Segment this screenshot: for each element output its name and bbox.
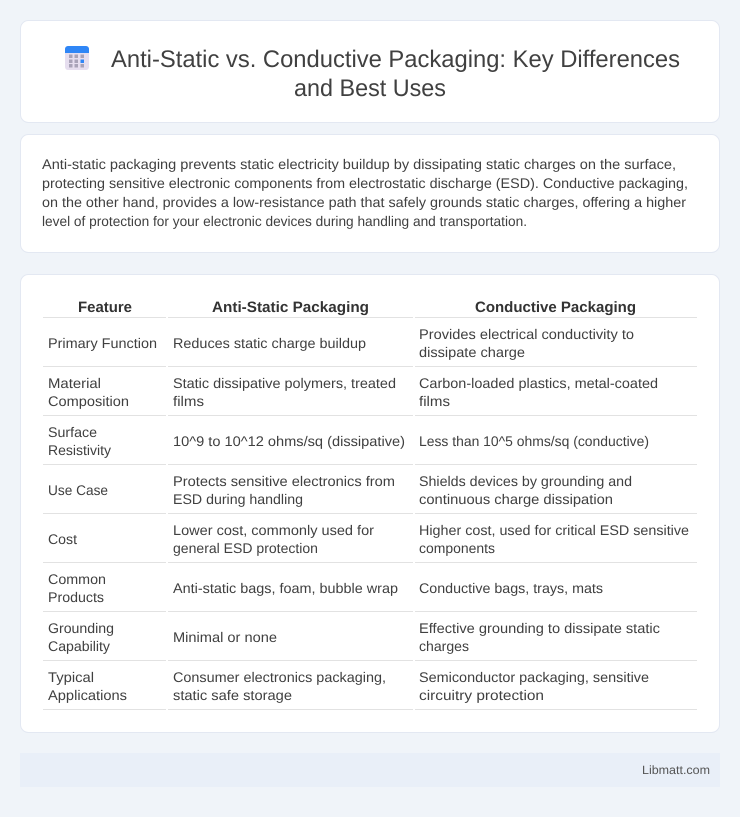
row: common products: Products: [48, 589, 104, 605]
row: primary function: Primary Function: [48, 335, 157, 351]
row: common products: [48, 571, 603, 605]
table header: [78, 299, 636, 316]
icon: calendar: [65, 46, 89, 70]
row: common products: Common: [48, 571, 106, 587]
table header: Feature: [78, 299, 132, 316]
table header: Anti-Static Packaging: [212, 299, 369, 316]
intro text: protecting sensitive electronic components from electrostatic discharge (ESD). Conductive packaging,: [42, 175, 688, 191]
row: cost: Higher cost, used for critical ESD sensitive: [419, 522, 689, 538]
row: primary function: dissipate charge: [419, 344, 525, 360]
row: common products: Anti-static bags, foam, bubble wrap: [173, 580, 398, 596]
row: typical applications: static safe storage: [173, 687, 292, 703]
row: surface resistivity: Surface: [48, 424, 97, 440]
row: material composition: [48, 375, 658, 409]
row: grounding capability: Minimal or none: [173, 629, 277, 645]
intro text: [42, 156, 688, 229]
row: cost: [48, 522, 689, 556]
row: use case: continuous charge dissipation: [419, 491, 613, 507]
row: material composition: Composition: [48, 393, 129, 409]
intro text: on the other hand, provides a low-resistance path that safely grounds static charges, offering a higher: [42, 194, 686, 210]
row: typical applications: circuitry protection: [419, 687, 544, 703]
title: Anti-Static vs. Conductive Packaging: Key Differences: [111, 46, 680, 73]
row: cost: Cost: [48, 531, 77, 547]
intro text: level of protection for your electronic devices during handling and transportation.: [42, 213, 527, 229]
row: cost: components: [419, 540, 495, 556]
row: use case: Use Case: [48, 482, 108, 498]
row: common products: Conductive bags, trays, mats: [419, 580, 603, 596]
row: material composition: Static dissipative polymers, treated: [173, 375, 396, 391]
row: primary function: Provides electrical conductivity to: [419, 326, 634, 342]
row: grounding capability: Capability: [48, 638, 110, 654]
row: typical applications: Consumer electronics packaging,: [173, 669, 386, 685]
intro text: Anti-static packaging prevents static electricity buildup by dissipating static charges on the surface,: [42, 156, 676, 172]
row: use case: ESD during handling: [173, 491, 303, 507]
row: typical applications: Typical: [48, 669, 94, 685]
row: grounding capability: [48, 620, 660, 654]
row: surface resistivity: [48, 424, 649, 458]
row: surface resistivity: Less than 10^5 ohms/sq (conductive): [419, 433, 649, 449]
title: and Best Uses: [294, 75, 446, 102]
row: material composition: Carbon-loaded plastics, metal-coated: [419, 375, 658, 391]
row: surface resistivity: 10^9 to 10^12 ohms/sq (dissipative): [173, 433, 405, 449]
row: surface resistivity: Resistivity: [48, 442, 111, 458]
title: [111, 46, 680, 102]
row: use case: Shields devices by grounding and: [419, 473, 632, 489]
footer: [20, 753, 720, 787]
table header: Conductive Packaging: [475, 299, 636, 316]
footer: Libmatt.com: [642, 763, 710, 777]
row: use case: Protects sensitive electronics from: [173, 473, 395, 489]
panel: introduction: [20, 134, 720, 252]
row: primary function: [48, 326, 634, 360]
row: grounding capability: Grounding: [48, 620, 114, 636]
row: cost: Lower cost, commonly used for: [173, 522, 374, 538]
row: primary function: Reduces static charge buildup: [173, 335, 366, 351]
row: material composition: films: [419, 393, 450, 409]
panel: comparison table: [20, 274, 720, 732]
row: grounding capability: charges: [419, 638, 469, 654]
row: material composition: Material: [48, 375, 101, 391]
panel: title card: [20, 20, 720, 122]
row: typical applications: Applications: [48, 687, 127, 703]
row: typical applications: [48, 669, 649, 703]
row: typical applications: Semiconductor packaging, sensitive: [419, 669, 649, 685]
row: grounding capability: Effective grounding to dissipate static: [419, 620, 660, 636]
row: material composition: films: [173, 393, 204, 409]
row: cost: general ESD protection: [173, 540, 318, 556]
row: use case: [48, 473, 632, 507]
